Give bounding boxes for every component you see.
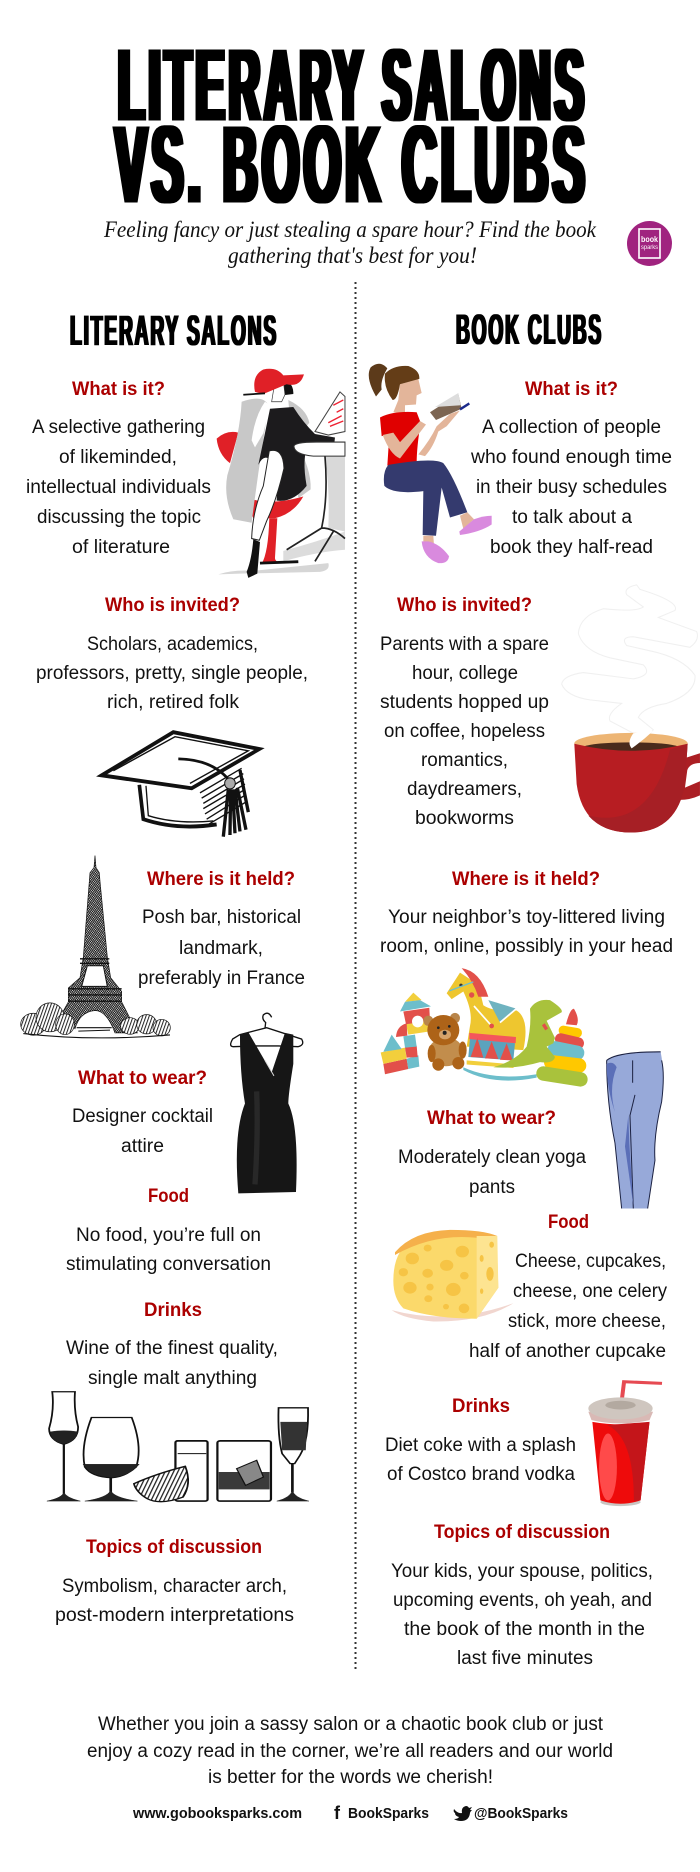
icon: BookSparks logo	[627, 221, 672, 266]
section: what is it: of literature	[72, 537, 170, 558]
icon: black dress on hanger	[231, 1013, 303, 1193]
section: who is invited: Parents with a spare	[380, 634, 549, 655]
section: drinks	[385, 1396, 576, 1485]
subtitle	[103, 217, 597, 268]
footer links: BookSparks	[348, 1805, 429, 1822]
section: what to wear: Designer cocktail	[72, 1106, 213, 1127]
icon: elegant woman at table	[217, 369, 345, 578]
icon: woman reading	[369, 364, 492, 563]
icon: twitter bird	[454, 1806, 472, 1821]
section: what to wear: What to wear?	[78, 1068, 207, 1089]
section: where is it held: Your neighbor’s toy-littered living	[388, 907, 665, 928]
section: what is it: of likeminded,	[59, 447, 177, 468]
section: topics of discussion	[391, 1522, 653, 1669]
section: who is invited: students hopped up	[380, 692, 549, 713]
section: where is it held: room, online, possibly in your head	[380, 936, 673, 957]
icon: toys	[381, 968, 581, 1081]
section: who is invited: rich, retired folk	[107, 692, 240, 713]
section: what is it: intellectual individuals	[26, 477, 211, 498]
icon: red soda cup	[588, 1382, 662, 1506]
icon: facebook: f	[334, 1803, 341, 1823]
section: what is it: What is it?	[525, 379, 618, 400]
section: food	[66, 1186, 271, 1275]
section: topics of discussion: post-modern interpretations	[55, 1605, 294, 1626]
section: food: Food	[148, 1186, 189, 1207]
section: who is invited: bookworms	[415, 808, 514, 829]
section: where is it held: landmark,	[179, 938, 263, 959]
section: who is invited: daydreamers,	[407, 779, 522, 800]
section: what is it: A selective gathering	[32, 417, 205, 438]
section: topics of discussion: the book of the month in the	[404, 1619, 645, 1640]
icon: coffee cup with steam	[562, 585, 700, 833]
section: where is it held	[138, 869, 305, 989]
icon: cheese wedge	[392, 1230, 513, 1321]
section: drinks	[66, 1300, 278, 1389]
section: what is it	[26, 379, 211, 558]
panel: literary salons: LITERARY SALONS	[70, 307, 278, 355]
section: what to wear: pants	[469, 1177, 515, 1198]
section: who is invited: Who is invited?	[105, 595, 240, 616]
section: topics of discussion: upcoming events, oh yeah, and	[393, 1590, 652, 1611]
section: topics of discussion	[55, 1537, 294, 1626]
section: where is it held: preferably in France	[138, 968, 305, 989]
section: who is invited: professors, pretty, single people,	[36, 663, 308, 684]
section: who is invited: Scholars, academics,	[87, 634, 258, 655]
section: what to wear: attire	[121, 1136, 164, 1157]
icon: BookSparks logo: book	[641, 235, 658, 244]
footer links	[132, 1803, 568, 1823]
section: what is it: discussing the topic	[37, 507, 201, 528]
center dotted divider	[354, 282, 356, 1672]
section: topics of discussion: Topics of discussion	[434, 1522, 610, 1543]
section: what is it	[470, 379, 672, 558]
title	[115, 28, 589, 226]
section: food: stick, more cheese,	[508, 1311, 666, 1332]
closing message	[87, 1714, 613, 1788]
section: where is it held	[380, 869, 673, 957]
section: who is invited	[380, 595, 549, 829]
closing message: Whether you join a sassy salon or a chaotic book club or just	[98, 1714, 604, 1735]
section: where is it held: Where is it held?	[452, 869, 600, 890]
section: food: Cheese, cupcakes,	[515, 1251, 666, 1272]
section: food: Food	[548, 1212, 589, 1233]
section: what to wear	[398, 1108, 586, 1198]
section: drinks: of Costco brand vodka	[387, 1464, 575, 1485]
section: drinks: Drinks	[144, 1300, 202, 1321]
icon: yoga pants	[607, 1052, 663, 1209]
section: who is invited: on coffee, hopeless	[384, 721, 545, 742]
section: topics of discussion: Your kids, your spouse, politics,	[391, 1561, 653, 1582]
section: topics of discussion: Symbolism, character arch,	[62, 1576, 287, 1597]
icon: graduation cap	[102, 732, 259, 837]
section: where is it held: Posh bar, historical	[142, 907, 301, 928]
section: food: cheese, one celery	[513, 1281, 667, 1302]
panel: book clubs	[369, 306, 700, 1669]
section: what to wear: Moderately clean yoga	[398, 1147, 586, 1168]
section: what is it: in their busy schedules	[476, 477, 667, 498]
section: what is it: What is it?	[72, 379, 165, 400]
footer links: @BookSparks	[474, 1805, 568, 1822]
icon: glasses and lemon	[47, 1392, 309, 1502]
closing message: is better for the words we cherish!	[208, 1767, 493, 1788]
section: who is invited: romantics,	[421, 750, 508, 771]
section: topics of discussion: Topics of discussion	[86, 1537, 262, 1558]
section: food: No food, you’re full on	[76, 1225, 261, 1246]
section: food	[469, 1212, 667, 1362]
section: drinks: Diet coke with a splash	[385, 1435, 576, 1456]
subtitle: Feeling fancy or just stealing a spare hour? Find the book	[103, 217, 597, 242]
panel: literary salons	[21, 307, 345, 1626]
section: topics of discussion: last five minutes	[457, 1648, 593, 1669]
icon: Eiffel Tower	[21, 855, 170, 1038]
section: who is invited	[36, 595, 308, 713]
section: what is it: book they half-read	[490, 537, 653, 558]
section: who is invited: Who is invited?	[397, 595, 532, 616]
closing message: enjoy a cozy read in the corner, we’re all readers and our world	[87, 1741, 613, 1762]
section: drinks: Drinks	[452, 1396, 510, 1417]
section: what to wear: What to wear?	[427, 1108, 556, 1129]
section: what is it: who found enough time	[470, 447, 672, 468]
icon: BookSparks logo: sparks	[641, 245, 658, 251]
section: what is it: to talk about a	[512, 507, 632, 528]
section: who is invited: hour, college	[412, 663, 518, 684]
section: drinks: Wine of the finest quality,	[66, 1338, 278, 1359]
section: what to wear	[72, 1068, 213, 1157]
footer links: www.gobooksparks.com	[132, 1805, 302, 1822]
subtitle: gathering that's best for you!	[228, 243, 477, 268]
section: where is it held: Where is it held?	[147, 869, 295, 890]
section: food: stimulating conversation	[66, 1254, 271, 1275]
section: food: half of another cupcake	[469, 1341, 666, 1362]
section: drinks: single malt anything	[88, 1368, 257, 1389]
section: what is it: A collection of people	[482, 417, 661, 438]
